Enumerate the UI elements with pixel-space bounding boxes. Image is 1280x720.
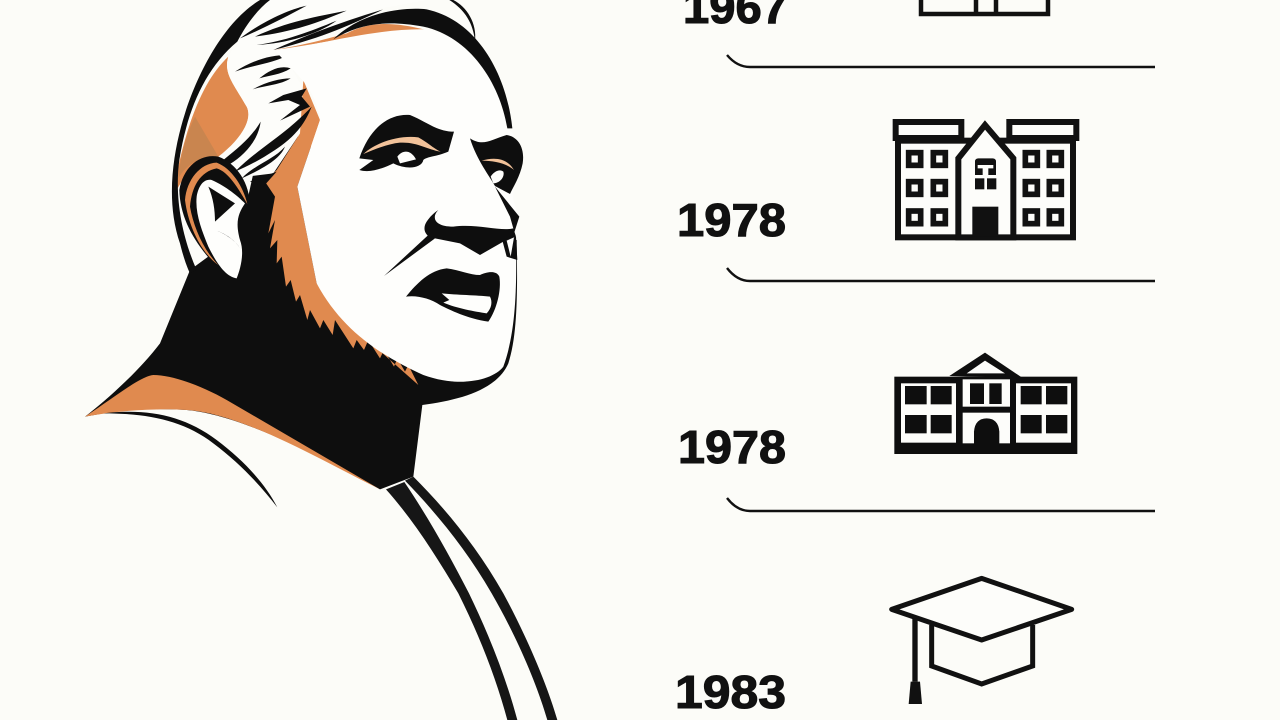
left strap	[386, 482, 517, 720]
icon: apartment school building	[896, 122, 1076, 237]
divider line	[727, 55, 1155, 67]
right strap	[405, 477, 557, 720]
head outline left	[172, 0, 270, 273]
shoulder line and coat straps	[103, 412, 557, 720]
ear	[179, 156, 252, 278]
divider line	[727, 498, 1155, 511]
timeline entry 1983	[675, 578, 1072, 718]
year 1978: 1978	[677, 194, 786, 246]
year 1978: 1978	[678, 421, 786, 473]
neck and collar	[85, 133, 517, 489]
right eye and brow	[470, 135, 523, 194]
face	[275, 29, 518, 382]
icon: graduation cap	[892, 578, 1072, 704]
white hair	[220, 0, 427, 177]
divider line	[727, 268, 1155, 281]
timeline entry 1978 second	[678, 353, 1155, 511]
shoulder line	[103, 412, 277, 507]
timeline entry 1978 first	[677, 122, 1155, 281]
year 1983: 1983	[675, 666, 786, 718]
nose	[384, 187, 519, 276]
left eye and brow	[359, 115, 454, 171]
head outline top arc	[333, 9, 512, 128]
hair strands	[223, 6, 383, 187]
mouth	[406, 268, 500, 322]
portrait illustration	[85, 0, 523, 489]
icon: building cropped at top	[921, 0, 1048, 14]
icon: school with pediment	[894, 353, 1077, 454]
pale hair accent	[273, 24, 427, 50]
shoulder highlight	[85, 375, 380, 489]
hairline orange strip with jagged beard edge	[265, 80, 418, 385]
timeline entry 1967	[683, 0, 1155, 67]
side hair orange	[177, 57, 248, 190]
